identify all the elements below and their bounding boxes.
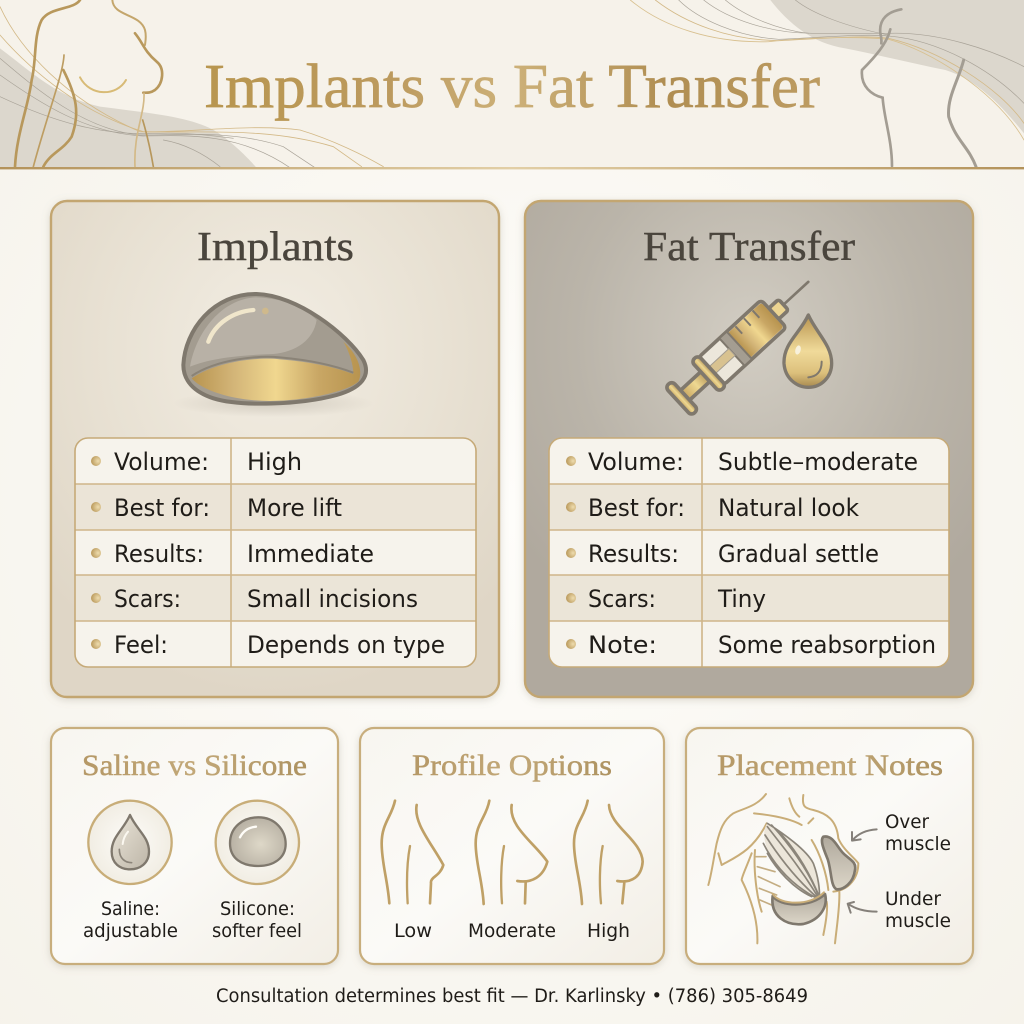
left decorative figure — [0, 0, 383, 168]
label: silicone: softer feel — [212, 920, 302, 942]
label: high: High — [587, 920, 630, 942]
row: note — [566, 631, 936, 659]
row: scars — [566, 585, 766, 613]
diagram: three profile silhouettes — [382, 801, 643, 904]
heading: profile options: Profile Options — [412, 749, 612, 782]
arrow: under muscle — [848, 902, 877, 913]
label: over muscle: muscle — [885, 833, 951, 855]
row: volume: High — [247, 448, 302, 476]
label: saline: Saline: — [101, 898, 160, 920]
panel: implants — [51, 201, 499, 697]
row: results — [91, 540, 374, 568]
row: scars — [91, 585, 418, 613]
row: results — [566, 540, 879, 568]
label: saline — [83, 898, 178, 942]
implant under muscle — [772, 894, 826, 924]
row: results: Gradual settle — [718, 540, 879, 568]
panel: fat transfer — [525, 201, 973, 697]
row: volume: Subtle–moderate — [718, 448, 918, 476]
icon: silicone gel — [216, 801, 299, 884]
right decorative figure — [630, 0, 1024, 167]
arrow: over muscle — [852, 829, 877, 841]
row: volume — [566, 448, 918, 476]
row: best for — [91, 494, 342, 522]
row: feel: Depends on type — [247, 631, 445, 659]
label: under muscle — [885, 888, 951, 932]
row: scars: Small incisions — [247, 585, 418, 613]
row: best for — [566, 494, 859, 522]
title: Implants vs Fat Transfer — [204, 53, 820, 121]
label: moderate: Moderate — [468, 920, 556, 942]
row: feel — [91, 631, 445, 659]
table: implants — [75, 438, 476, 667]
row: note: Note: — [588, 631, 657, 659]
panel: profile options — [360, 728, 664, 964]
label: under muscle: Under — [885, 888, 941, 910]
icon: syringe and fat droplet — [664, 267, 832, 417]
row: scars: Scars: — [588, 585, 656, 613]
row: feel: Feel: — [114, 631, 168, 659]
label: under muscle: muscle — [885, 910, 951, 932]
label: silicone — [212, 898, 302, 942]
row: results: Immediate — [247, 540, 374, 568]
heading: placement notes: Placement Notes — [717, 749, 943, 782]
label: over muscle: Over — [885, 811, 929, 833]
row: scars: Tiny — [717, 585, 766, 613]
footer note: Consultation determines best fit — Dr. Karlinsky • (786) 305-8649 — [216, 986, 808, 1007]
row: note: Some reabsorption — [718, 631, 936, 659]
row: volume: Volume: — [114, 448, 209, 476]
table: fat transfer — [549, 438, 949, 667]
row: scars: Scars: — [114, 585, 181, 613]
row: best for: Natural look — [718, 494, 859, 522]
row: best for: Best for: — [588, 494, 685, 522]
label: low: Low — [394, 920, 432, 942]
label: saline: adjustable — [83, 920, 178, 942]
heading: implants: Implants — [197, 223, 354, 269]
label: silicone: Silicone: — [220, 898, 295, 920]
muscle — [763, 823, 819, 898]
heading: saline vs silicone: Saline vs Silicone — [82, 749, 307, 782]
implant over muscle — [822, 837, 855, 889]
panel: placement notes — [686, 728, 973, 964]
label: over muscle — [885, 811, 951, 855]
row: volume: Volume: — [588, 448, 684, 476]
row: results: Results: — [588, 540, 679, 568]
icon: saline drop — [88, 801, 172, 884]
row: best for: More lift — [247, 494, 342, 522]
diagram: torso with muscle and implant placements — [708, 794, 877, 943]
panel: saline vs silicone — [51, 728, 338, 964]
heading: fat transfer: Fat Transfer — [643, 223, 855, 269]
row: best for: Best for: — [114, 494, 210, 522]
row: volume — [91, 448, 302, 476]
row: results: Results: — [114, 540, 204, 568]
header banner — [0, 0, 1024, 168]
icon: implant — [173, 294, 373, 417]
